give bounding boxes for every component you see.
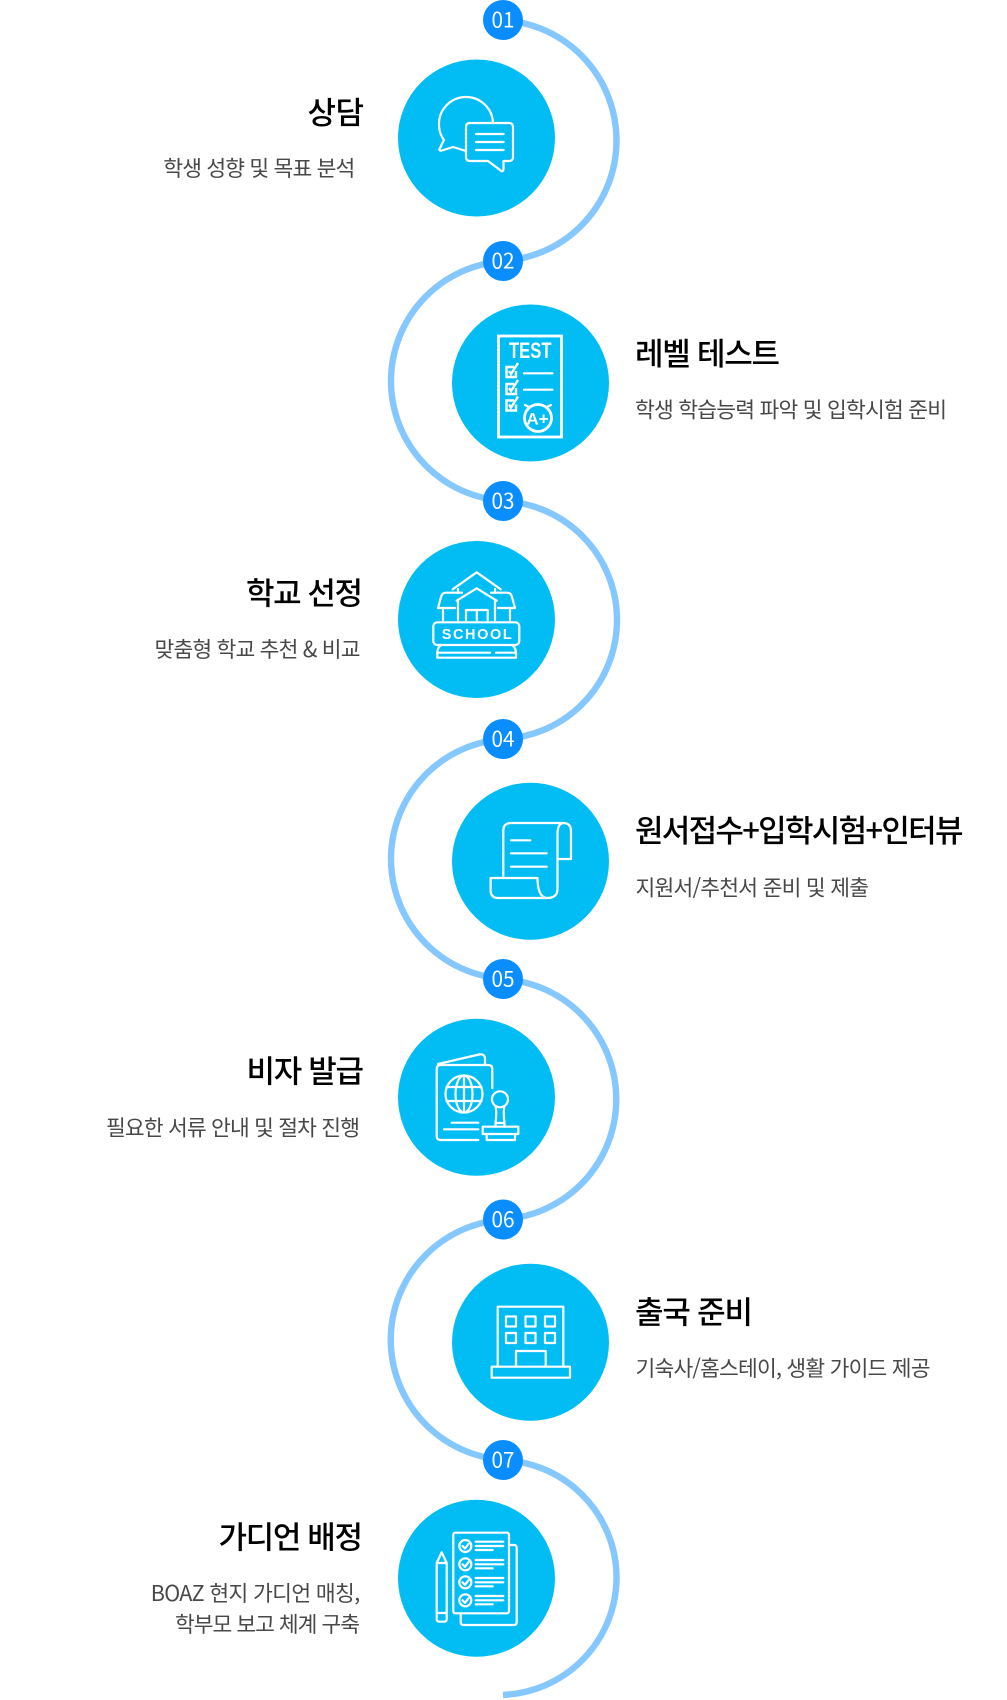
badge 02: 02 xyxy=(492,246,514,276)
description: BOAZ 현지 가디언 매칭, xyxy=(151,1577,360,1608)
step 7: guardian xyxy=(151,1440,555,1657)
badge 02 xyxy=(483,241,523,281)
badge 03: 03 xyxy=(492,486,514,516)
description: 지원서/추천서 준비 및 제출 xyxy=(636,872,869,902)
title: 출국 준비 xyxy=(635,1288,753,1332)
icon: school building xyxy=(398,541,555,698)
badge 03 xyxy=(483,481,523,521)
icon: speech bubbles xyxy=(398,60,555,216)
description xyxy=(151,1577,360,1639)
description: 학생 성향 및 목표 분석 xyxy=(163,152,355,183)
description: 필요한 서류 안내 및 절차 진행 xyxy=(106,1112,360,1142)
icon: scroll xyxy=(452,783,609,940)
badge 05: 05 xyxy=(492,964,514,994)
step 3: school selection xyxy=(154,481,555,698)
description: 학부모 보고 체계 구축 xyxy=(175,1608,360,1639)
icon: test sheet xyxy=(452,304,609,462)
icon: passport and stamp xyxy=(398,1019,555,1176)
step 5: visa xyxy=(106,959,555,1176)
badge 06: 06 xyxy=(492,1204,514,1234)
description: 맞춤형 학교 추천 & 비교 xyxy=(154,633,360,664)
title: 상담 xyxy=(308,88,364,133)
badge 04 xyxy=(483,719,523,759)
description: 기숙사/홈스테이, 생활 가이드 제공 xyxy=(636,1352,930,1383)
badge 07 xyxy=(483,1440,523,1480)
icon: checklist and pencil xyxy=(398,1500,555,1657)
badge 06 xyxy=(483,1200,523,1240)
step 1: consultation xyxy=(163,0,555,216)
badge 05 xyxy=(483,959,523,999)
icon: school building: SCHOOL xyxy=(442,627,512,643)
step 6: departure xyxy=(452,1200,930,1421)
icon: dormitory building xyxy=(452,1264,609,1421)
title: 레벨 테스트 xyxy=(635,329,780,374)
title: 비자 발급 xyxy=(246,1046,364,1092)
description: 학생 학습능력 파악 및 입학시험 준비 xyxy=(635,394,947,424)
badge 07: 07 xyxy=(492,1444,514,1474)
badge 04: 04 xyxy=(492,724,514,754)
badge 01 xyxy=(483,0,523,40)
step 4: application xyxy=(452,719,964,940)
icon: test sheet: A+ xyxy=(526,410,549,428)
step 2: level test xyxy=(452,241,947,462)
badge 01: 01 xyxy=(492,4,514,34)
title: 원서접수+입학시험+인터뷰 xyxy=(635,806,964,851)
connector path xyxy=(391,20,617,1695)
title: 학교 선정 xyxy=(246,568,363,614)
icon: test sheet: TEST xyxy=(509,338,552,363)
title: 가디언 배정 xyxy=(218,1512,363,1558)
